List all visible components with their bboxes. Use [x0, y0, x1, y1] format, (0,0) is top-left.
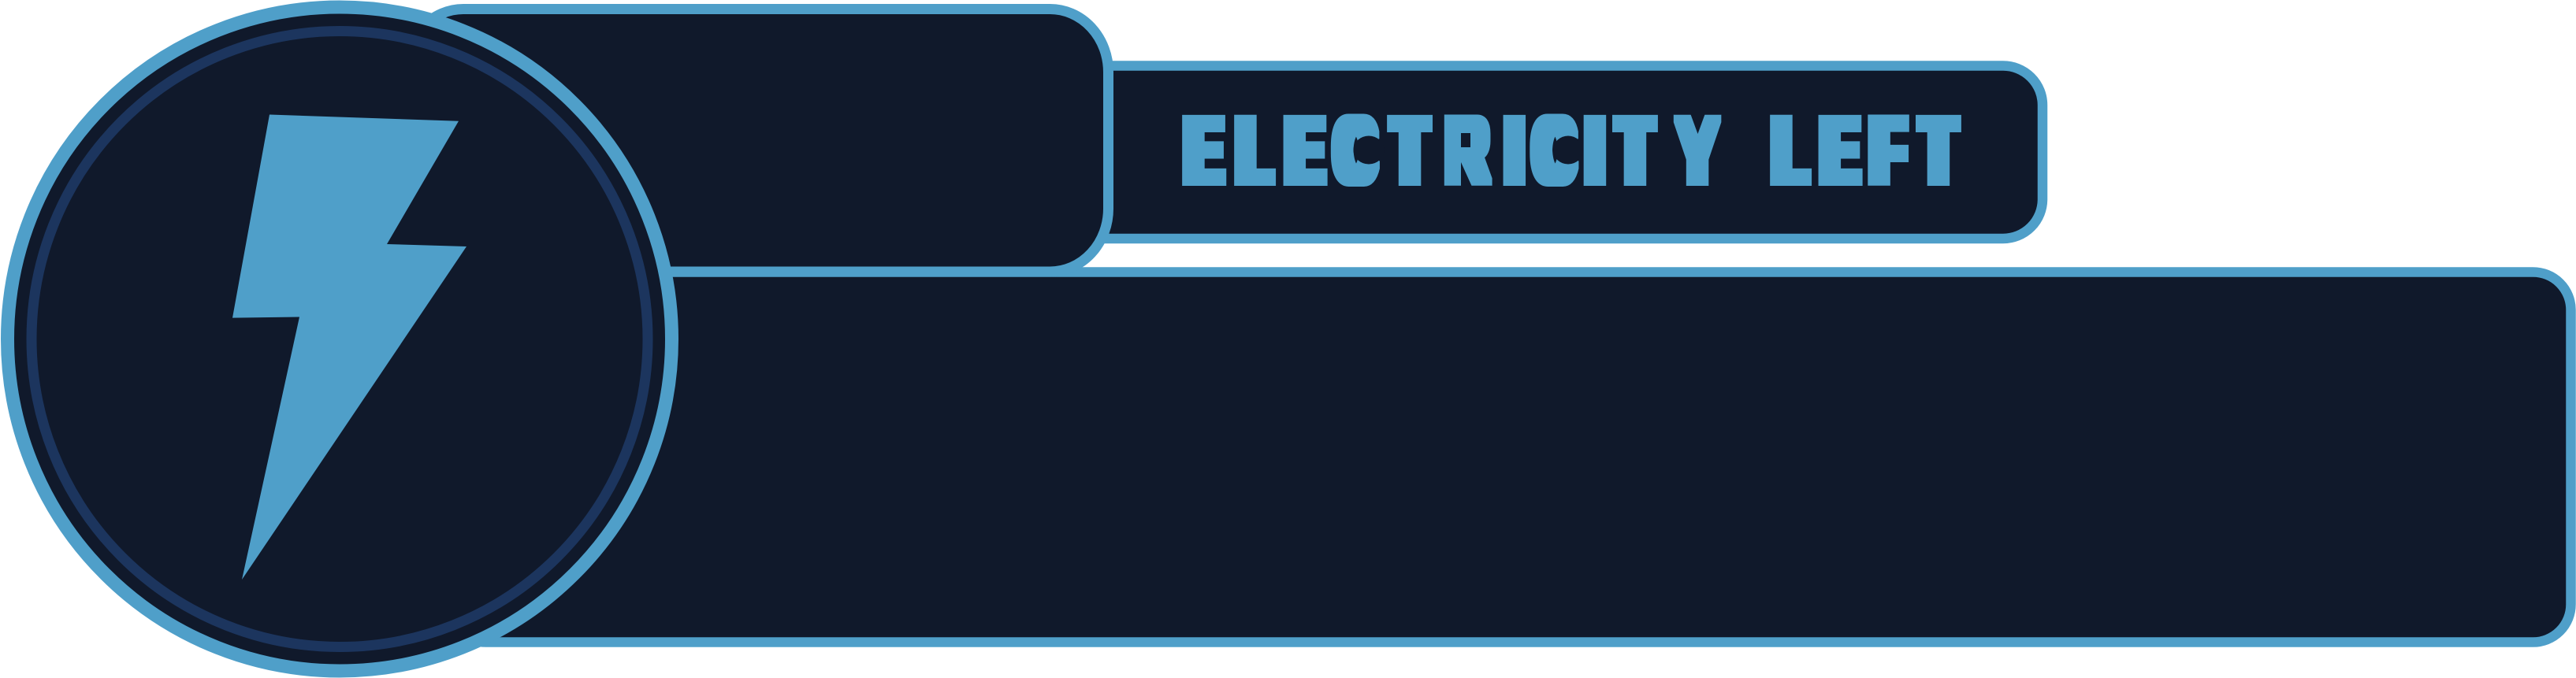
- panel: large value bar: [448, 272, 2570, 643]
- icon: lightning bolt: [232, 115, 467, 580]
- badge inner ring: [32, 31, 648, 647]
- icon: circular badge with lightning bolt: [8, 7, 671, 671]
- badge outer ring: [8, 7, 671, 671]
- panel: upper connector tab: [405, 9, 1108, 272]
- panel: title bar: [1024, 66, 2043, 239]
- title: electricity left: ELECTRICITY LEFT: [1186, 98, 1954, 202]
